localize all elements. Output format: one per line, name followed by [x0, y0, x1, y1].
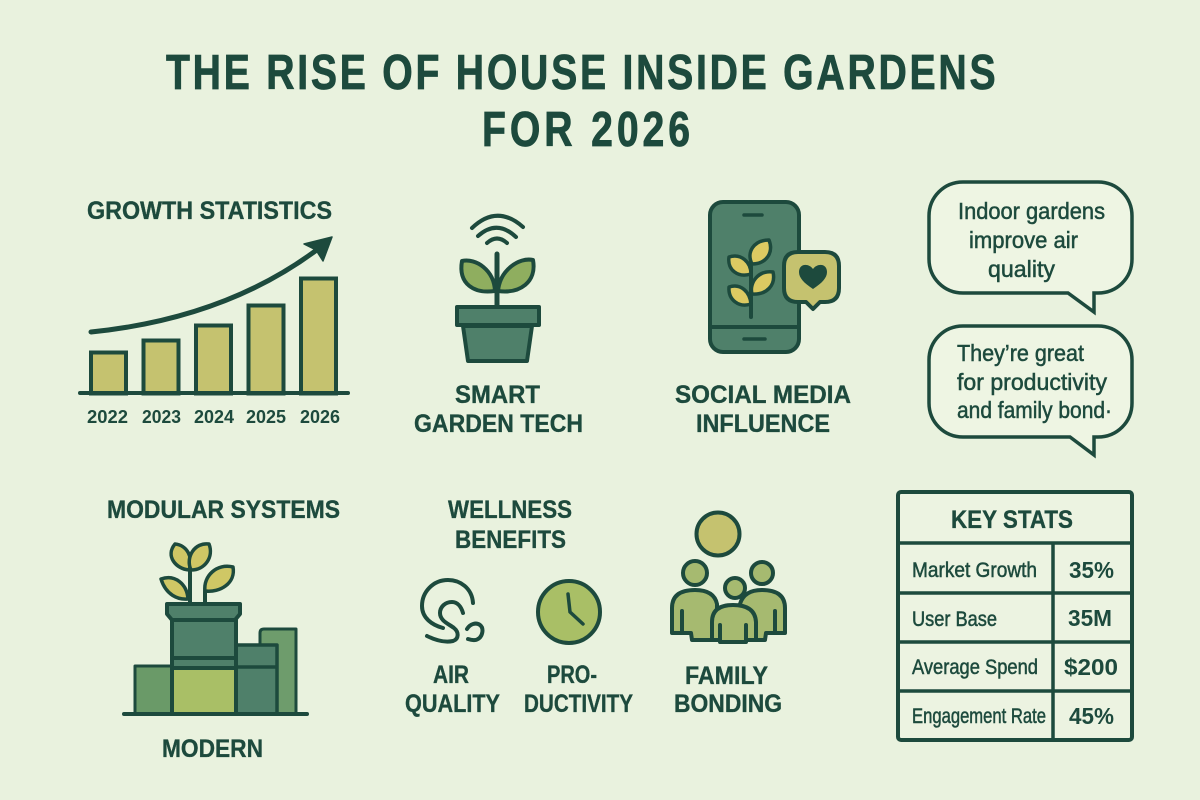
bar chart: 2024 [194, 407, 234, 427]
label: air quality [405, 661, 500, 718]
row: user base [912, 605, 1112, 631]
label: family bonding: BONDING [674, 690, 782, 718]
bar chart: 2025 [246, 407, 286, 427]
label: productivity [524, 661, 633, 718]
row: market growth: 35% [1069, 557, 1114, 583]
arrow: upward growth trend [91, 237, 332, 332]
heading: modular systems: MODULAR SYSTEMS [107, 496, 340, 524]
row: user base: 35M [1068, 605, 1112, 631]
label: social media influence: SOCIAL MEDIA [675, 381, 851, 409]
label: smart garden tech: SMART [455, 381, 540, 409]
label: smart garden tech [414, 381, 583, 438]
table frame and grid [898, 492, 1132, 740]
callout: productivity speech bubble [929, 326, 1132, 455]
icon: air quality swirl [422, 580, 482, 642]
icon: phone with plant and like bubble [710, 202, 839, 352]
title: THE RISE OF HOUSE INSIDE GARDENS [166, 46, 996, 100]
panel: family bonding [672, 512, 785, 718]
row: average spend: $200 [1064, 654, 1118, 680]
icon: smart plant pot with wifi [457, 216, 539, 361]
label: family bonding: FAMILY [685, 662, 768, 690]
heading: growth statistics: GROWTH STATISTICS [87, 197, 332, 225]
callout: air quality speech bubble: improve air [969, 227, 1078, 253]
label: air quality: QUALITY [405, 690, 500, 718]
bar chart: 2022 [87, 407, 128, 427]
row: average spend: Average Spend [912, 656, 1038, 679]
label: productivity: PRO- [547, 661, 597, 689]
panel: smart garden tech [414, 216, 583, 438]
label: air quality: AIR [433, 661, 469, 689]
icon: family group [672, 512, 785, 642]
callout: air quality speech bubble: quality [988, 256, 1056, 282]
row: average spend [912, 654, 1118, 680]
table heading: KEY STATS [951, 506, 1073, 534]
label: social media influence: INFLUENCE [696, 410, 830, 438]
title [166, 46, 996, 157]
label: modern: MODERN [162, 735, 263, 763]
bar chart: 2023 [142, 407, 181, 427]
heading: wellness benefits: BENEFITS [455, 526, 566, 554]
panel: wellness benefits [405, 496, 633, 718]
callout: productivity speech bubble: and family bond· [957, 397, 1112, 423]
heading: wellness benefits [448, 496, 572, 554]
bar chart: 2026 [300, 407, 340, 427]
label: productivity: DUCTIVITY [524, 690, 633, 718]
row: engagement rate: 45% [1069, 703, 1114, 729]
row: user base: User Base [912, 608, 997, 631]
title: FOR 2026 [482, 103, 690, 157]
panel: key stats table [898, 492, 1132, 740]
bar chart [80, 278, 348, 427]
panel: social media influence [675, 202, 851, 438]
icon: productivity clock [538, 581, 600, 643]
callout: productivity speech bubble: for productivity [957, 369, 1107, 395]
panel: modular systems [107, 496, 340, 763]
panel: growth statistics [80, 197, 348, 427]
panel: testimonials [929, 182, 1132, 455]
callout: productivity speech bubble: They’re great [957, 340, 1085, 366]
row: engagement rate: Engagement Rate [912, 705, 1046, 728]
icon: modular planters [124, 544, 307, 714]
heading: wellness benefits: WELLNESS [448, 496, 572, 524]
label: family bonding [674, 662, 782, 718]
label: smart garden tech: GARDEN TECH [414, 410, 583, 438]
row: market growth: Market Growth [912, 559, 1037, 582]
callout: air quality speech bubble: Indoor gardens [958, 198, 1105, 224]
callout: air quality speech bubble [929, 182, 1132, 312]
label: social media influence [675, 381, 851, 438]
row: market growth [912, 557, 1114, 583]
